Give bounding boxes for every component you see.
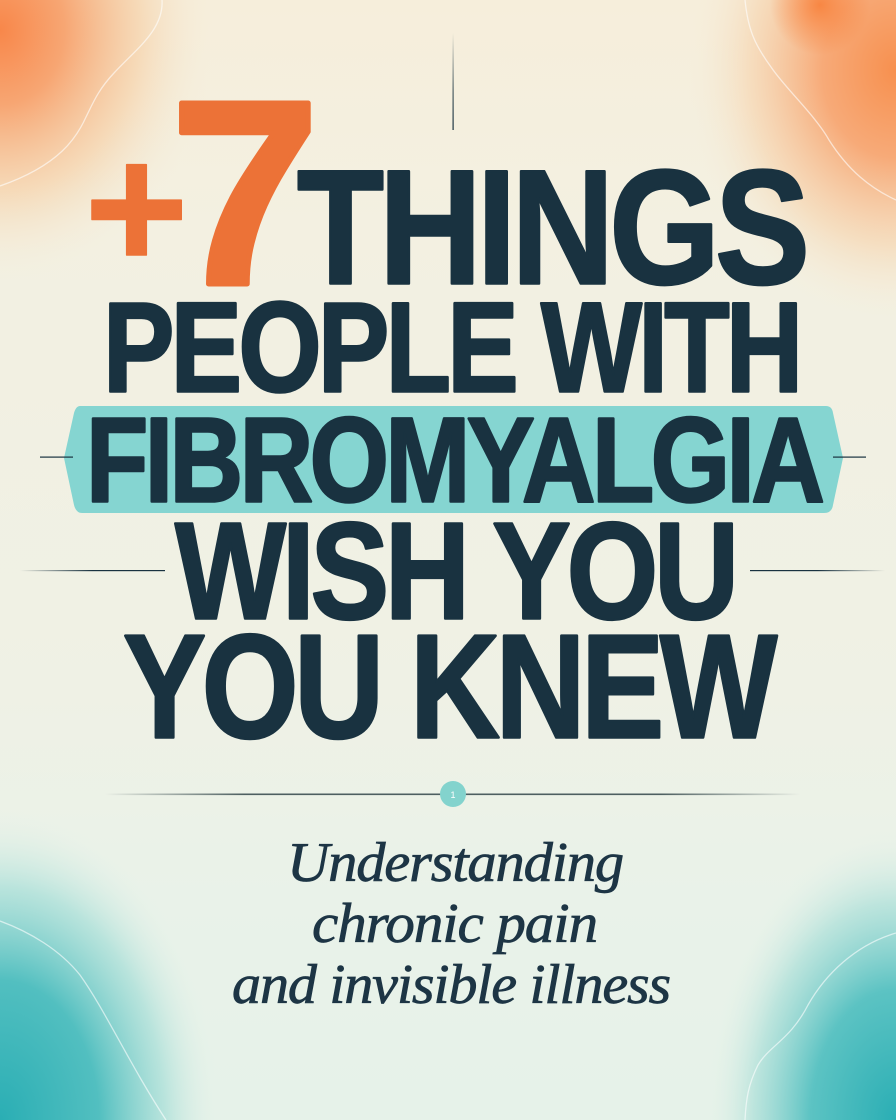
divider with circle: 1: [450, 790, 456, 800]
banner shape: [64, 406, 843, 513]
heading line: WISH YOU: WISH YOU: [175, 494, 735, 648]
heading line: YOU KNEW: YOU KNEW: [123, 604, 778, 770]
large number 7: 7: [170, 46, 320, 340]
subtitle: and invisible illness: [232, 954, 670, 1016]
highlighted banner: [64, 392, 843, 528]
banner tick lines: [40, 456, 866, 458]
subtitle: Understanding: [287, 832, 623, 894]
subtitle: [232, 832, 670, 1016]
decorative top vertical line: [452, 33, 454, 130]
heading line: THINGS: THINGS: [297, 136, 805, 318]
side lines beside WISH YOU: [20, 570, 885, 571]
plus sign: +: [85, 108, 188, 307]
subtitle: chronic pain: [312, 893, 597, 955]
divider with circle: [105, 781, 800, 807]
